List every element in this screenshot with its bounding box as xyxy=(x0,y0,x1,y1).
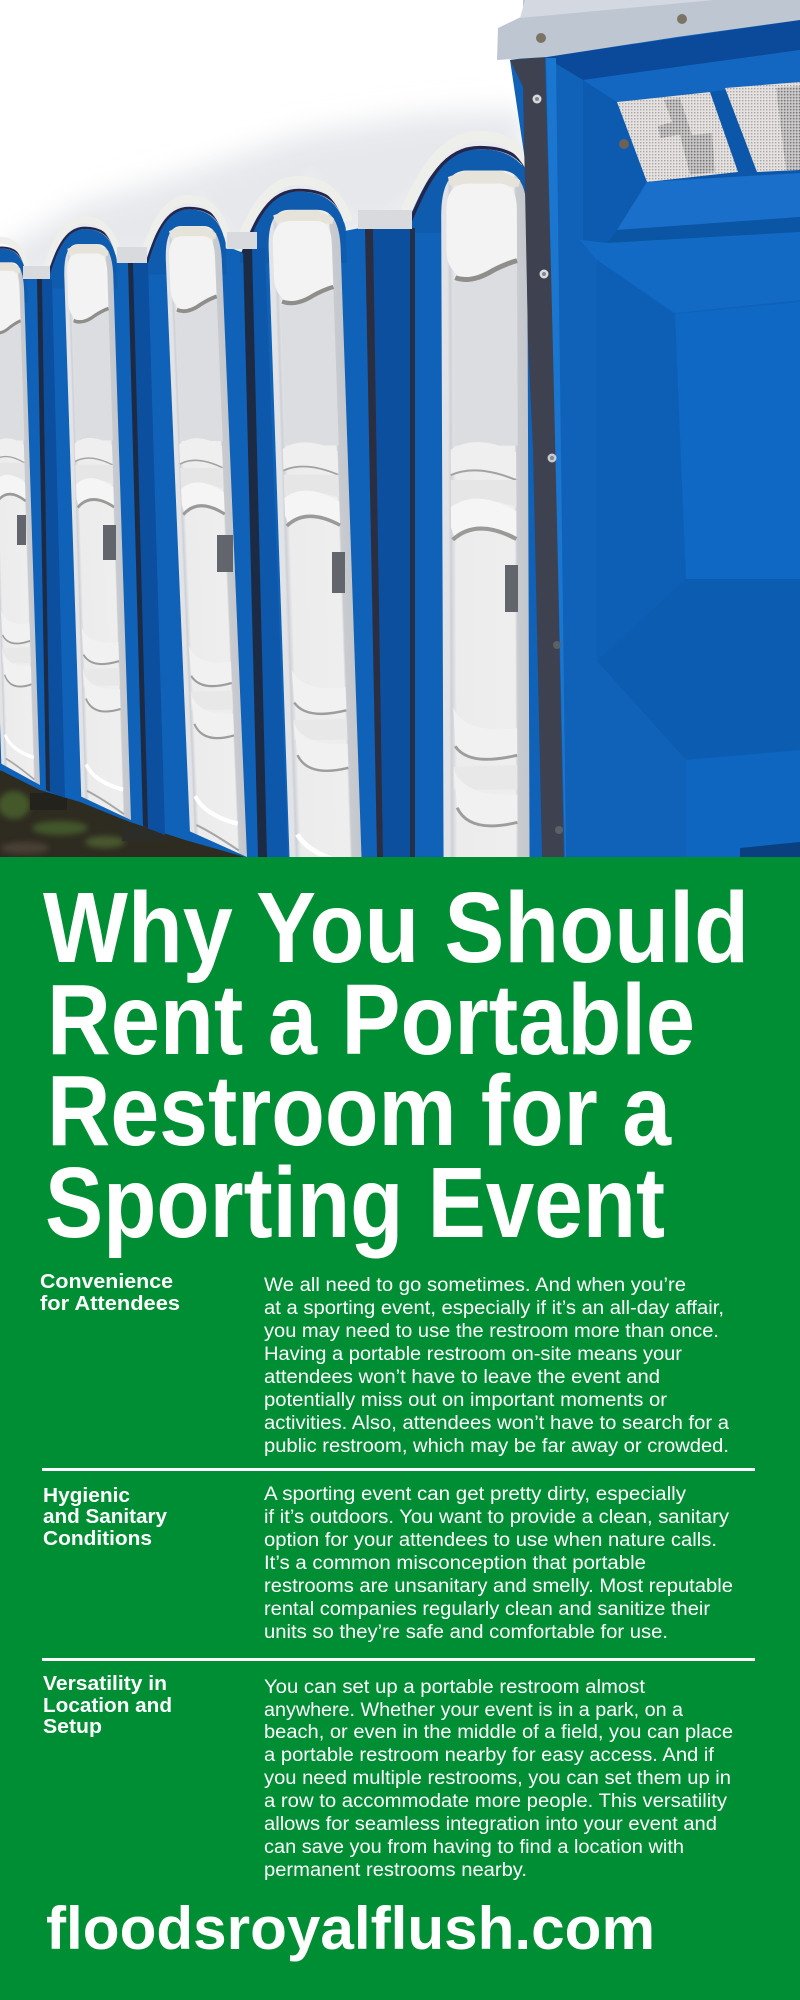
roofs xyxy=(0,110,525,285)
section body: versatility: a portable restroom nearby for easy access. And if xyxy=(264,1745,715,1766)
body panels xyxy=(580,232,800,313)
section body: versatility: permanent restrooms nearby. xyxy=(264,1860,527,1881)
door 5 xyxy=(403,136,540,978)
section body: versatility: you need multiple restrooms, you can set them up in xyxy=(264,1768,731,1789)
section body: convenience: We all need to go sometimes. And when you’re xyxy=(264,1275,686,1296)
footer website: floodsroyalflush.com xyxy=(46,1895,655,1962)
large foreground unit xyxy=(497,0,800,857)
grey corner strip xyxy=(510,57,564,857)
green content panel xyxy=(40,872,755,1962)
section heading: hygienic: and Sanitary xyxy=(43,1505,168,1528)
section body: hygienic: A sporting event can get pretty dirty, especially xyxy=(264,1484,687,1505)
door 3 xyxy=(139,199,254,857)
section body: versatility: You can set up a portable restroom almost xyxy=(264,1677,646,1698)
title xyxy=(43,872,749,1259)
section body: hygienic: rental companies regularly clean and sanitize their xyxy=(264,1599,711,1620)
section heading: convenience xyxy=(40,1270,180,1315)
section heading: versatility xyxy=(43,1672,172,1738)
section body: versatility: anywhere. Whether your event is in a park, on a xyxy=(264,1700,683,1721)
section body: versatility xyxy=(264,1677,733,1881)
section body: hygienic: option for your attendees to use when nature calls. xyxy=(264,1530,717,1551)
section heading: convenience: Convenience xyxy=(40,1270,173,1293)
section body: convenience: attendees won’t have to leave the event and xyxy=(264,1367,660,1388)
section body: convenience: you may need to use the restroom more than once. xyxy=(264,1321,719,1342)
section body: convenience: public restroom, which may be far away or crowded. xyxy=(264,1436,729,1457)
section body: convenience xyxy=(264,1275,729,1457)
title: Restroom for a xyxy=(47,1055,672,1167)
section heading: versatility: Setup xyxy=(43,1715,102,1738)
title: Sporting Event xyxy=(45,1147,665,1259)
title: Rent a Portable xyxy=(47,964,695,1076)
door 1 xyxy=(0,240,45,785)
door 4 xyxy=(235,180,372,901)
section body: convenience: activities. Also, attendees won’t have to search for a xyxy=(264,1413,729,1434)
section body: versatility: allows for seamless integration into your event and xyxy=(264,1814,717,1835)
roof band xyxy=(497,0,800,60)
window 2 xyxy=(725,82,800,172)
section heading: versatility: Versatility in xyxy=(43,1672,167,1695)
section body: versatility: a row to accommodate more people. This versatility xyxy=(264,1791,728,1812)
section body: convenience: potentially miss out on important moments or xyxy=(264,1390,668,1411)
section body: convenience: at a sporting event, especially if it’s an all-day affair, xyxy=(264,1298,724,1319)
roof brackets xyxy=(23,210,412,279)
grass xyxy=(0,770,250,857)
section heading: versatility: Location and xyxy=(43,1694,172,1717)
section body: hygienic: units so they’re safe and comfortable for use. xyxy=(264,1622,668,1643)
section heading: hygienic: Hygienic xyxy=(43,1484,130,1507)
section body: hygienic: restrooms are unsanitary and smelly. Most reputable xyxy=(264,1576,733,1597)
section body: versatility: can save you from having to find a location with xyxy=(264,1837,684,1858)
section heading: convenience: for Attendees xyxy=(40,1292,180,1315)
section body: hygienic xyxy=(264,1484,733,1643)
section heading: hygienic xyxy=(43,1484,168,1550)
shadow band under roof xyxy=(545,20,800,80)
hero photo: row of portable restrooms xyxy=(0,0,800,857)
bevel below windows xyxy=(617,173,800,230)
lit edge xyxy=(546,58,566,857)
section body: hygienic: It’s a common misconception that portable xyxy=(264,1553,646,1574)
window recess xyxy=(583,80,647,243)
window 1 xyxy=(617,92,738,182)
dark pillars xyxy=(37,228,415,857)
rivets xyxy=(532,14,687,834)
door 2 xyxy=(41,220,137,820)
blue unit bodies xyxy=(0,160,545,857)
section body: convenience: Having a portable restroom on-site means your xyxy=(264,1344,683,1365)
section body: versatility: beach, or even in the middle of a field, you can place xyxy=(264,1722,733,1743)
door handles xyxy=(17,515,518,612)
section heading: hygienic: Conditions xyxy=(43,1527,152,1550)
section body: hygienic: if it’s outdoors. You want to provide a clean, sanitary xyxy=(264,1507,730,1528)
